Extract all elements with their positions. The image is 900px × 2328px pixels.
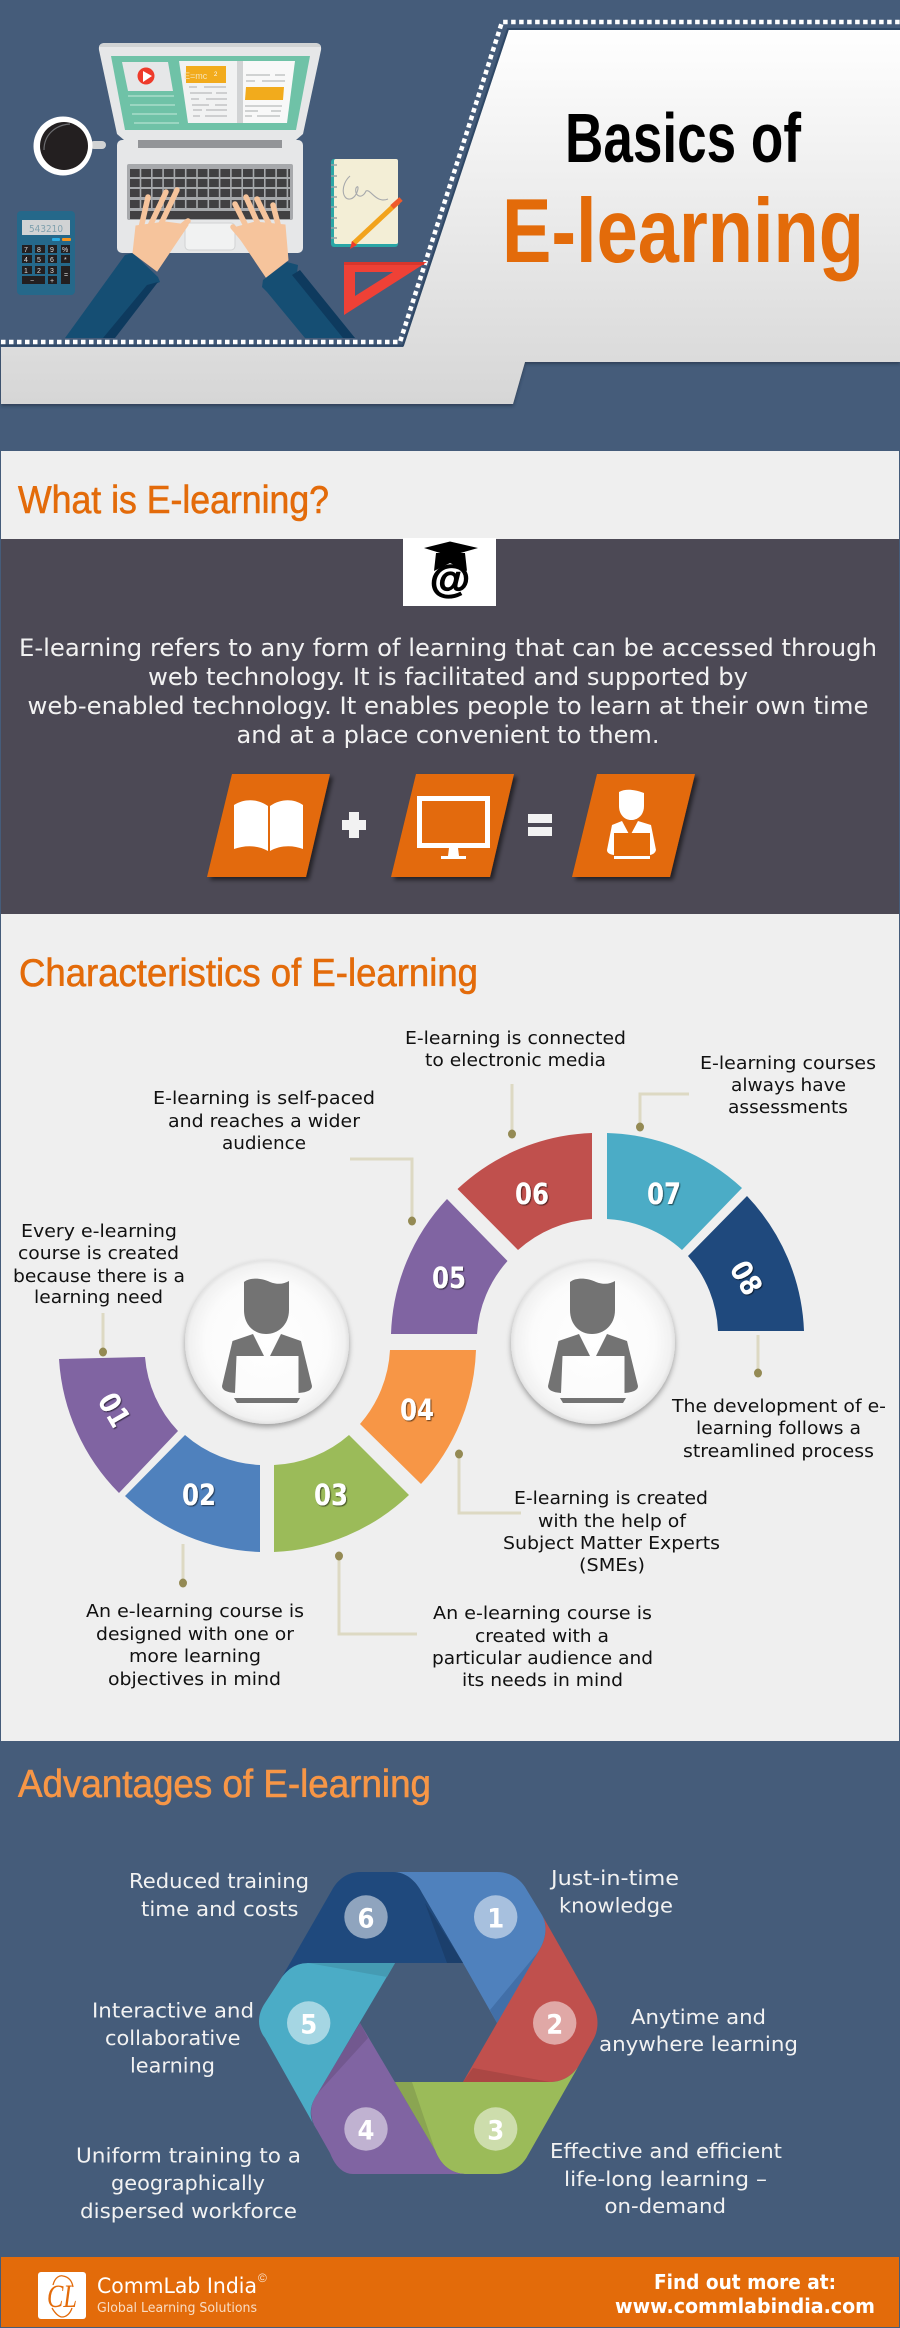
label 04 <box>503 1488 720 1576</box>
chart: upper half ring <box>391 1133 804 1334</box>
icon: calculator: 4 <box>24 257 28 264</box>
tagline: Global Learning Solutions <box>97 2301 257 2316</box>
segment 02 <box>125 1435 260 1552</box>
label 03 <box>432 1603 653 1691</box>
label 07: always have <box>731 1075 846 1096</box>
label 01: learning need <box>34 1287 163 1308</box>
label 6 <box>129 1869 309 1921</box>
badge numbers: 1 <box>487 1904 504 1934</box>
label 01: course is created <box>18 1243 179 1264</box>
label 07 <box>700 1053 876 1118</box>
icon: calculator: 7 <box>24 247 28 254</box>
chart: hexagon cycle <box>259 1872 598 2174</box>
icon: calculator: 1 <box>24 268 28 275</box>
label 2: Anytime and <box>631 2005 766 2029</box>
icon: learner tile <box>572 774 695 877</box>
label 04: Subject Matter Experts <box>503 1533 720 1554</box>
equation: book plus computer equals learner <box>207 774 695 877</box>
label 3: life-long learning – <box>564 2167 767 2191</box>
footer <box>1 2257 899 2327</box>
icon: laptop screen <box>99 43 321 140</box>
segment numbers: 07 <box>647 1177 681 1211</box>
label 06: to electronic media <box>425 1050 606 1071</box>
segment numbers <box>91 1177 769 1512</box>
label 05 <box>153 1088 375 1154</box>
icon: calculator: 3 <box>50 268 54 275</box>
label 02 <box>86 1601 304 1690</box>
badge numbers: 2 <box>546 2010 563 2040</box>
label 4: dispersed workforce <box>80 2199 297 2223</box>
ribbon 3 <box>395 2067 578 2174</box>
label 5: Interactive and <box>92 1998 254 2022</box>
label 03: created with a <box>475 1626 609 1647</box>
icon: right arm <box>262 262 355 338</box>
label 01 <box>13 1221 185 1308</box>
label 02: An e-learning course is <box>86 1601 304 1622</box>
connector lines <box>103 1084 758 1634</box>
segment 05 <box>391 1199 508 1334</box>
illustration: laptop on desk <box>17 43 427 338</box>
ribbon 4 <box>311 2023 467 2174</box>
ribbon 2 <box>463 1915 598 2082</box>
definition text: web technology. It is facilitated and supported by <box>148 663 748 691</box>
badge numbers: 5 <box>300 2010 317 2040</box>
icon: person at laptop, left <box>185 1260 349 1424</box>
segment 08 <box>688 1196 804 1331</box>
chart: lower half ring <box>59 1350 476 1552</box>
segment numbers: 05 <box>432 1261 466 1295</box>
label 03: An e-learning course is <box>433 1603 652 1624</box>
badge numbers <box>300 1904 563 2146</box>
icon: calculator: = <box>64 272 68 279</box>
label 08: streamlined process <box>683 1441 874 1462</box>
label 6: time and costs <box>141 1897 298 1921</box>
segment numbers: 01 <box>91 1387 137 1433</box>
label 3: Effective and efficient <box>550 2139 782 2163</box>
label 2 <box>599 2005 798 2056</box>
copyright mark: © <box>258 2271 267 2285</box>
label 5: collaborative <box>105 2026 240 2050</box>
brand name: CommLab India <box>97 2274 257 2298</box>
label 1: Just-in-time <box>549 1866 679 1890</box>
label 03: its needs in mind <box>462 1670 623 1691</box>
icon: book tile <box>207 774 330 877</box>
label 3 <box>550 2139 782 2218</box>
label 5 <box>92 1998 254 2078</box>
badge numbers: 4 <box>358 2116 374 2146</box>
definition text: web-enabled technology. It enables people to learn at their own time <box>28 692 868 720</box>
label 5: learning <box>130 2054 215 2078</box>
label 05: and reaches a wider <box>168 1111 361 1132</box>
icon: graduation cap with at sign <box>403 538 496 606</box>
number badges <box>287 1895 576 2151</box>
icon: coffee cup <box>34 116 106 176</box>
icon: calculator: + <box>50 278 54 285</box>
label 04: E-learning is created <box>514 1488 708 1509</box>
ribbon 6 <box>282 1872 463 1977</box>
label 02: more learning <box>129 1646 261 1667</box>
icon: left arm <box>65 253 160 338</box>
panel: what is e-learning heading <box>1 451 899 539</box>
icon: person at laptop, right <box>511 1260 675 1424</box>
ribbon fold shading <box>308 1903 550 2150</box>
label 01: because there is a <box>13 1266 185 1287</box>
equals sign <box>528 814 552 836</box>
label 6: Reduced training <box>129 1869 309 1893</box>
label 07: E-learning courses <box>700 1053 876 1074</box>
label 4: Uniform training to a <box>76 2144 301 2168</box>
title: Basics of: Basics of <box>565 99 802 177</box>
label 03: particular audience and <box>432 1648 653 1669</box>
plus sign <box>342 812 366 838</box>
label 04: with the help of <box>538 1511 687 1532</box>
label 2: anywhere learning <box>599 2032 798 2056</box>
label 4: geographically <box>111 2171 265 2195</box>
segment 03 <box>274 1435 409 1552</box>
label 04: (SMEs) <box>579 1555 645 1576</box>
definition text: E-learning refers to any form of learning that can be accessed through <box>19 634 877 662</box>
label 08: learning follows a <box>696 1418 861 1439</box>
find out more: Find out more at: <box>654 2270 836 2294</box>
segment numbers: 04 <box>400 1393 434 1427</box>
segment numbers: 02 <box>182 1478 216 1512</box>
icon: graduation cap with at sign: @ <box>430 559 470 601</box>
icon: calculator: 9 <box>50 247 54 254</box>
heading: Advantages of E-learning <box>18 1763 431 1806</box>
label 02: designed with one or <box>96 1624 295 1645</box>
panel: characteristics of e-learning <box>1 914 899 1741</box>
icon: calculator: − <box>30 278 34 285</box>
label 06: E-learning is connected <box>405 1028 626 1049</box>
ribbon 1 <box>393 1872 545 2023</box>
icon: calculator: 2 <box>37 268 41 275</box>
icon: right hand <box>233 197 288 277</box>
segment 07 <box>607 1133 742 1250</box>
icon: calculator: 5 <box>37 257 41 264</box>
icon: red set square <box>344 262 427 315</box>
label 4 <box>76 2144 301 2223</box>
badge numbers: 3 <box>487 2116 504 2146</box>
icon: calculator: % <box>62 247 68 254</box>
label 1: knowledge <box>559 1894 673 1918</box>
logo: CommLab India: CL <box>47 2279 77 2315</box>
label 07: assessments <box>728 1097 848 1118</box>
connector dots <box>99 1122 762 1588</box>
header banner <box>0 22 900 404</box>
label 01: Every e-learning <box>21 1221 177 1242</box>
icon: calculator: * <box>64 257 67 264</box>
icon: computer tile <box>391 774 514 877</box>
segment 04 <box>360 1350 476 1484</box>
panel: what is e-learning body <box>1 538 899 914</box>
icon: notebook and pen <box>331 159 401 249</box>
icon: calculator: 543210 <box>29 224 63 235</box>
heading: What is E-learning? <box>18 479 329 522</box>
label 3: on-demand <box>604 2194 726 2218</box>
heading: Characteristics of E-learning <box>19 952 478 995</box>
ribbon 5 <box>259 1963 395 2127</box>
label 1 <box>549 1866 679 1918</box>
badge numbers: 6 <box>358 1904 374 1934</box>
icon: laptop screen: 2 <box>214 72 218 78</box>
segment numbers: 03 <box>314 1478 348 1512</box>
definition text <box>19 634 877 749</box>
icon: laptop screen: E=mc <box>184 71 208 81</box>
label 08: The development of e- <box>671 1396 886 1417</box>
banner panel <box>1 29 900 404</box>
icon: calculator <box>17 211 75 295</box>
segment 01 <box>59 1357 178 1493</box>
label 05: E-learning is self-paced <box>153 1088 375 1109</box>
label 08 <box>671 1396 886 1462</box>
icon: laptop base <box>117 140 303 253</box>
segment 06 <box>458 1133 592 1250</box>
definition text: and at a place convenient to them. <box>236 721 660 749</box>
icon: left hand <box>133 190 188 271</box>
panel: advantages of e-learning <box>18 1763 798 2223</box>
segment numbers: 06 <box>515 1177 549 1211</box>
label 05: audience <box>222 1133 306 1154</box>
logo: CommLab India <box>38 2272 86 2319</box>
website: www.commlabindia.com <box>615 2294 875 2318</box>
label 06 <box>405 1028 626 1071</box>
label 02: objectives in mind <box>108 1669 281 1690</box>
segment numbers: 08 <box>723 1255 769 1301</box>
icon: calculator: 6 <box>50 257 54 264</box>
banner dotted border <box>0 22 900 346</box>
icon: calculator: 8 <box>37 247 41 254</box>
